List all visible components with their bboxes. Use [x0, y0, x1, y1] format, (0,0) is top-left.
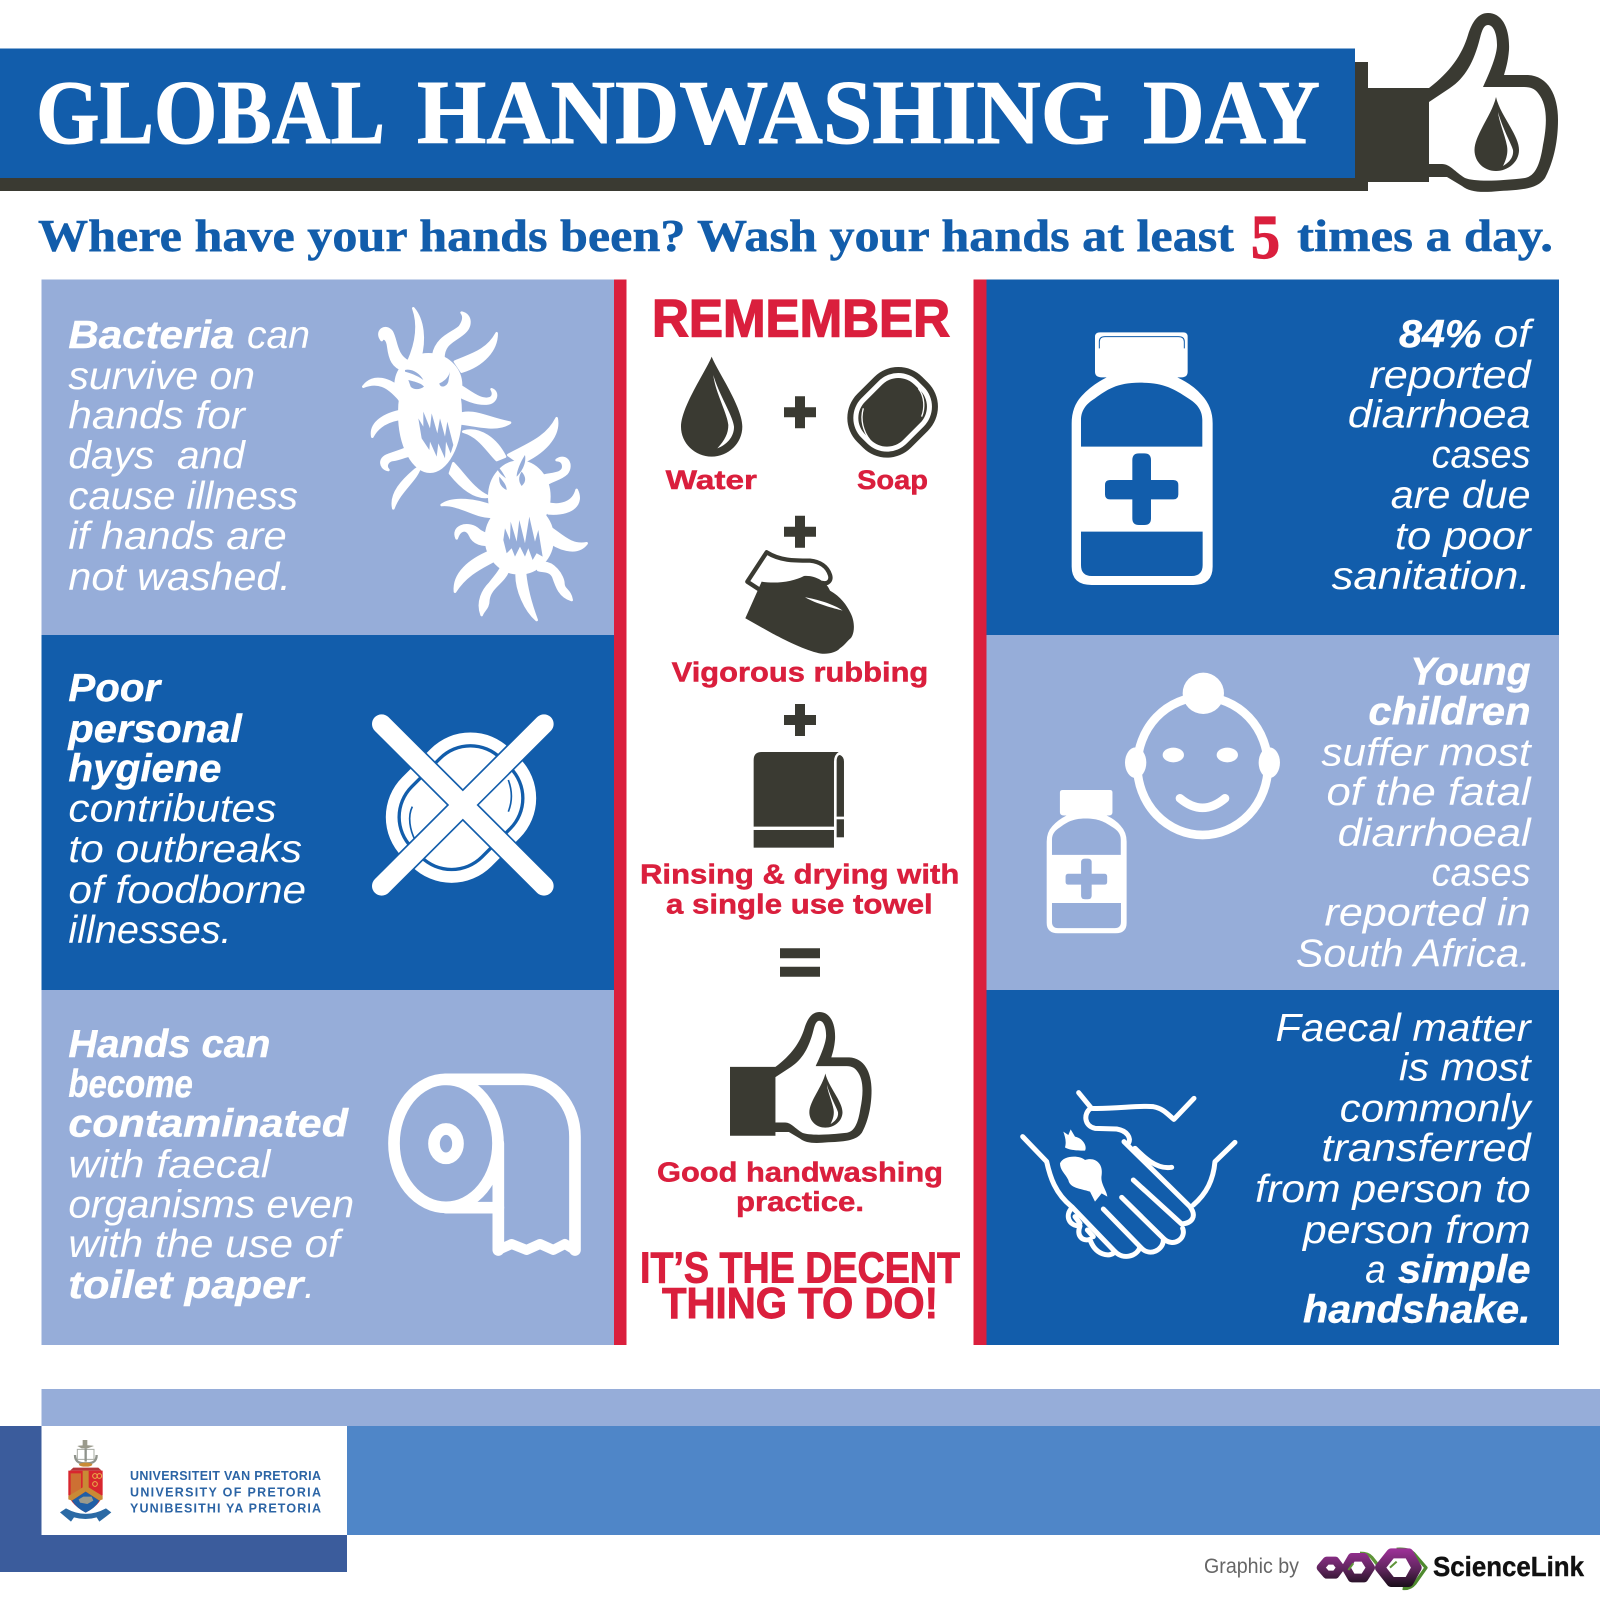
text: bacteria: days and [68, 434, 246, 477]
text: handshake: a [1365, 1249, 1386, 1292]
text: sanitation: reported [1369, 354, 1532, 397]
text: toilet paper: organisms even [68, 1183, 354, 1226]
text: toilet paper [68, 1023, 354, 1307]
icon: thumbs up with water drop [1368, 13, 1558, 192]
text: hygiene: personal [67, 708, 243, 751]
text: toilet paper: with the use of [68, 1223, 344, 1266]
text: toilet paper: toilet paper [68, 1264, 305, 1307]
icon: crossed out soap [362, 709, 560, 906]
text: sanitation: sanitation. [1332, 555, 1531, 598]
text: handshake: commonly [1340, 1087, 1533, 1130]
text: sanitation: are due [1391, 474, 1531, 517]
icon: plus [784, 704, 816, 736]
text: handshake: transferred [1321, 1127, 1532, 1170]
panel: young children [986, 635, 1559, 990]
callout: decent thing: THING TO DO! [662, 1279, 938, 1328]
icon: toilet roll [394, 1079, 575, 1250]
title [36, 62, 1320, 163]
text: university names: UNIVERSITEIT VAN PRETORIA [130, 1469, 321, 1483]
text: bacteria: Bacteria [68, 314, 234, 357]
subtitle: 5 [1251, 204, 1280, 272]
icon: equals [780, 948, 820, 977]
text: toilet paper: Hands can [68, 1023, 270, 1066]
text: university names [130, 1469, 321, 1516]
text: bacteria [68, 314, 310, 599]
title: DAY [1143, 62, 1320, 163]
label: rinsing and drying: Rinsing & drying with [640, 858, 959, 890]
heading: remember: REMEMBER [652, 290, 950, 348]
icon: medicine bottle [1072, 332, 1213, 585]
title: GLOBAL [36, 62, 385, 163]
text: young children: suffer most [1321, 731, 1533, 774]
text: young children [1296, 651, 1533, 975]
subtitle: times a day. [1297, 211, 1553, 261]
credit: graphic by: Graphic by [1204, 1555, 1299, 1578]
text: bacteria: if hands are [68, 515, 287, 558]
wordmark: sciencelink: ScienceLink [1433, 1551, 1584, 1582]
text: toilet paper: . [304, 1264, 315, 1307]
icon: plus [784, 516, 816, 548]
text: young children: children [1368, 690, 1531, 734]
icon: water drop [681, 357, 742, 457]
text: sanitation: to poor [1395, 515, 1533, 558]
text: toilet paper: contaminated [68, 1103, 349, 1146]
text: bacteria: can [247, 314, 310, 357]
text: sanitation: diarrhoea [1348, 394, 1531, 437]
text: handshake: handshake. [1303, 1288, 1531, 1331]
panel: hygiene [42, 635, 614, 990]
text: sanitation: cases [1432, 433, 1531, 476]
callout: decent thing: IT’S THE DECENT [640, 1244, 960, 1292]
header banner [0, 48, 1368, 191]
label: soap: Soap [857, 465, 928, 495]
text: handshake: person from [1302, 1209, 1531, 1252]
callout: decent thing [640, 1244, 960, 1328]
text: handshake: Faecal matter [1276, 1007, 1533, 1050]
text: hygiene: Poor [68, 667, 162, 710]
text: handshake: simple [1398, 1249, 1531, 1292]
text: handshake [1255, 1007, 1533, 1331]
text: bacteria: not washed. [68, 556, 291, 599]
label: good handwashing practice: practice. [736, 1186, 864, 1217]
text: bacteria: hands for [68, 395, 247, 438]
icon: baby and bottle [1047, 673, 1280, 933]
text: young children: Young [1410, 651, 1531, 694]
text: hygiene: to outbreaks [68, 828, 302, 871]
text: toilet paper: with faecal [68, 1144, 272, 1186]
panel: bacteria [42, 280, 614, 635]
label: rinsing and drying [640, 858, 959, 919]
text: hygiene: contributes [68, 787, 277, 830]
panel: sanitation [986, 280, 1559, 635]
text: young children: cases [1432, 852, 1531, 895]
text: sanitation [1332, 313, 1535, 598]
label: rinsing and drying: a single use towel [666, 888, 933, 919]
text: bacteria: cause illness [68, 475, 298, 518]
subtitle: Where have your hands been? Wash your hands at least [38, 211, 1234, 261]
panel: toilet paper [42, 990, 614, 1345]
panel: handshake [986, 990, 1559, 1345]
text: sanitation: of [1494, 313, 1535, 356]
logo: university crest [60, 1440, 111, 1522]
footer band [0, 1389, 1600, 1572]
text: university names: YUNIBESITHI YA PRETORIA [130, 1502, 321, 1516]
icon: small thumbs up [730, 1012, 872, 1143]
text: hygiene: hygiene [68, 748, 221, 791]
text: hygiene: of foodborne [68, 869, 306, 912]
subtitle [38, 204, 1553, 272]
label: good handwashing practice [657, 1156, 943, 1217]
text: sanitation: 84% [1399, 313, 1482, 356]
icon: towel [754, 752, 844, 848]
panel: remember column [614, 280, 986, 1345]
text: university names: UNIVERSITY OF PRETORIA [130, 1486, 321, 1500]
label: vigorous rubbing: Vigorous rubbing [672, 657, 928, 688]
text: bacteria: survive on [68, 355, 255, 398]
icon: bacteria [363, 308, 587, 620]
text: young children: diarrhoeal [1338, 812, 1532, 855]
text: young children: of the fatal [1326, 771, 1532, 814]
text: toilet paper: become [68, 1063, 193, 1106]
icon: rubbing hands [745, 552, 854, 654]
label: good handwashing practice: Good handwashing [657, 1156, 943, 1188]
text: handshake: is most [1399, 1047, 1533, 1090]
icon: soap [833, 353, 952, 472]
label: water: Water [666, 465, 758, 495]
text: hygiene: illnesses. [68, 909, 232, 952]
logo: sciencelink [1321, 1549, 1584, 1588]
text: young children: reported in [1324, 892, 1531, 934]
text: hygiene [67, 667, 306, 952]
icon: handshake [1023, 1093, 1235, 1256]
text: young children: South Africa. [1296, 932, 1531, 975]
title: HANDWASHING [417, 62, 1110, 163]
icon: plus [784, 396, 816, 428]
text: handshake: from person to [1255, 1168, 1531, 1211]
